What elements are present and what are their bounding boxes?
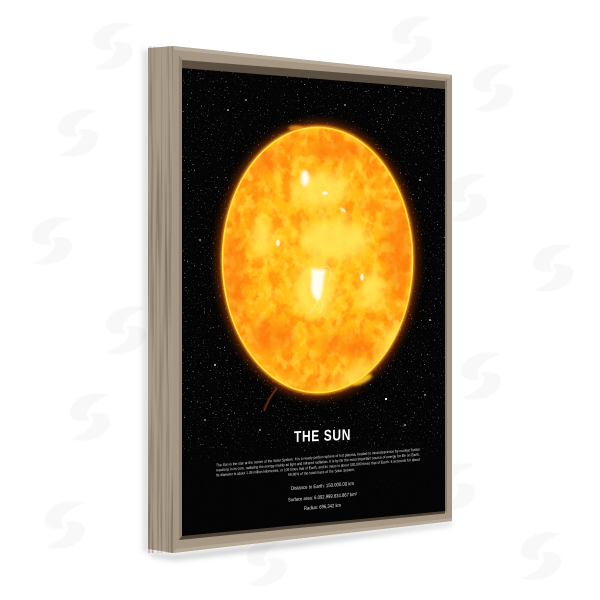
description paragraph: The Sun is the star at the center of the Solar System. It is a nearly perfect sphere of hot plasma, heated to incandescence by nuclear fusion: [216, 447, 420, 467]
sun surface texture: [220, 125, 416, 395]
frame front face: [173, 46, 452, 553]
description paragraph: reactions in its core, radiating the energy mainly as light and infrared radiation. It is by far the most important source of energy for life on Earth.: [216, 452, 420, 472]
sun rim highlight: [222, 128, 412, 392]
sun disc: [222, 127, 413, 393]
description paragraph: Its diameter is about 1.39 million kilometres, or 109 times that of Earth, and its mass is about 330,000 times that of Earth. It accounts for about: [216, 457, 421, 477]
the sun: [218, 123, 416, 411]
frame left side face: [148, 46, 173, 553]
frame inner bevel: [179, 55, 447, 540]
poster: space background: [182, 60, 445, 540]
description paragraph: [216, 447, 421, 477]
description paragraph: 99.86% of the total mass of the Solar System.: [288, 467, 355, 477]
magnetic loops around main flare: [309, 266, 331, 314]
white flares: [276, 170, 364, 301]
solar prominence: [264, 388, 277, 411]
yellow regions: [252, 172, 412, 390]
bright stars: [199, 99, 431, 431]
dark fade behind text: [182, 440, 445, 540]
solar facts list: Radius: 696,342 km: [304, 503, 341, 512]
solar facts list: [288, 481, 357, 512]
orange regions: [224, 140, 411, 357]
sun outer glow: [218, 123, 416, 397]
framed poster scene: [138, 46, 453, 562]
solar facts list: Distance to Earth: 150.000.00 km: [291, 481, 354, 492]
star field: [182, 60, 445, 540]
poster title: THE SUN: [294, 427, 351, 446]
frame drop shadow: [143, 50, 452, 560]
wooden frame: [148, 46, 452, 553]
solar facts list: Surface area: 6.092.999.834.867 km²: [288, 492, 357, 503]
